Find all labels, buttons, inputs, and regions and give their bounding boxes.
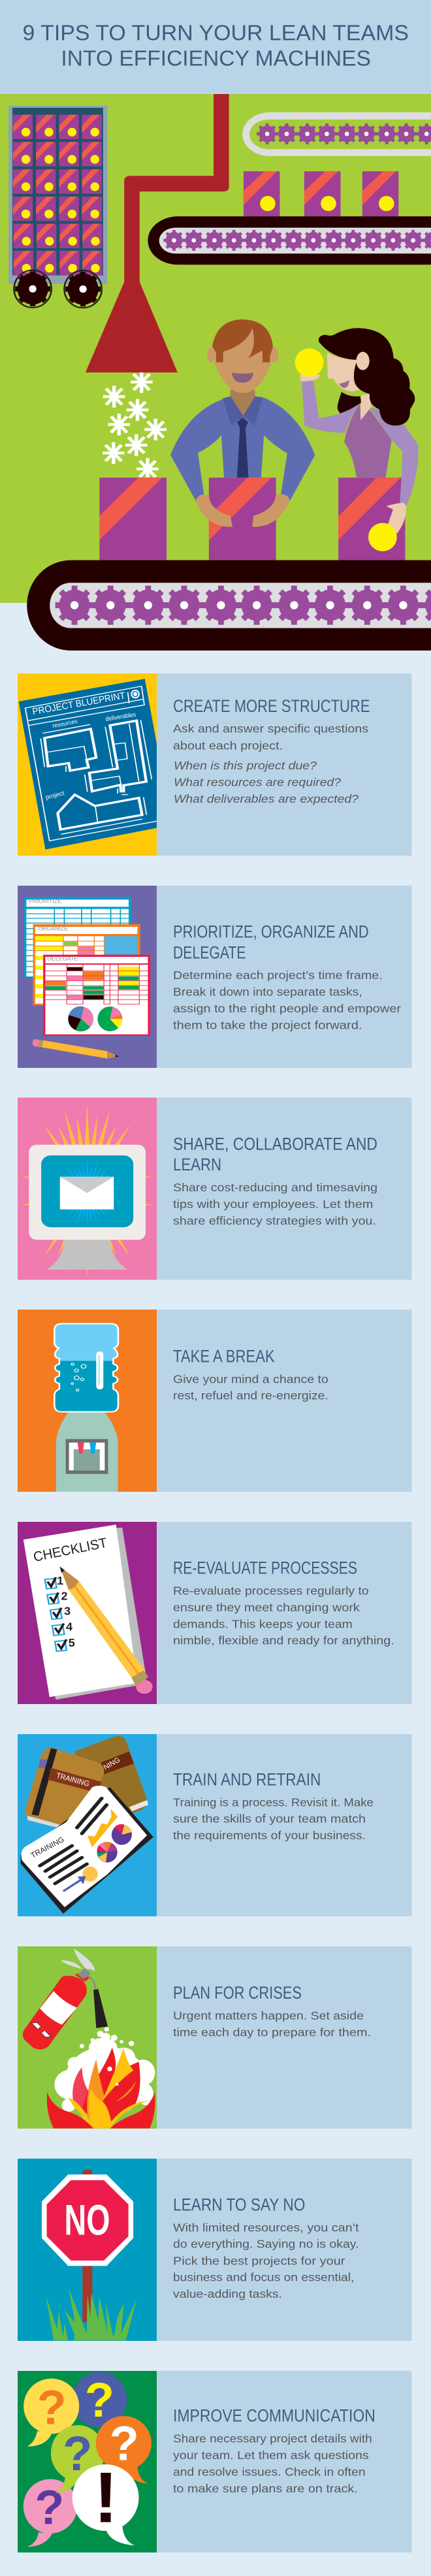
icon: speech bubbles	[18, 2371, 157, 2552]
body text: tips with your employees. Let them	[173, 1198, 373, 1211]
body text: Share necessary project details with	[173, 2432, 372, 2445]
panel: prioritize, organize and delegate	[18, 886, 411, 1068]
icon: speech bubbles: ?	[37, 2380, 67, 2434]
heading: TAKE A BREAK	[173, 1347, 275, 1366]
body text: When is this project due?	[174, 759, 317, 772]
body text	[173, 2432, 372, 2495]
icon: checklist and pencil	[18, 1522, 157, 1704]
icon: no sign in grass	[18, 2159, 157, 2341]
title	[22, 20, 409, 71]
icon: speech bubbles: ?	[110, 2417, 139, 2471]
icon: training books: TRAINING	[56, 1772, 90, 1788]
icon: project blueprint: project	[45, 790, 65, 801]
icon: speech bubbles: !	[94, 2457, 118, 2537]
icon: training books	[18, 1734, 157, 1916]
icon: project blueprint	[18, 673, 172, 856]
lower conveyor belt	[27, 560, 431, 651]
icon: water cooler	[18, 1310, 157, 1492]
flames	[47, 2048, 155, 2129]
heading: DELEGATE	[173, 942, 246, 962]
body text: time each day to prepare for them.	[173, 2025, 371, 2038]
icon: checklist and pencil: 5	[69, 1636, 75, 1649]
heading: CREATE MORE STRUCTURE	[173, 696, 370, 716]
body text	[173, 2221, 359, 2300]
body text: the requirements of your business.	[173, 1829, 366, 1842]
icon: training books: NING	[103, 1756, 121, 1772]
body text	[173, 1584, 394, 1647]
icon: checklist and pencil: 2	[61, 1589, 67, 1602]
heading: IMPROVE COMMUNICATION	[173, 2406, 375, 2425]
body text: Give your mind a chance to	[173, 1372, 328, 1385]
body text: Ask and answer specific questions	[173, 722, 368, 735]
body text: What deliverables are expected?	[174, 792, 359, 805]
body text: nimble, flexible and ready for anything.	[173, 1634, 394, 1647]
panel: plan for crises	[18, 1946, 411, 2129]
icon: checklist and pencil: 3	[64, 1605, 71, 1618]
body text: Re-evaluate processes regularly to	[173, 1584, 369, 1597]
panel: take a break	[18, 1310, 411, 1492]
body text	[173, 1795, 374, 1842]
body text: assign to the right people and empower	[173, 1002, 401, 1015]
title: INTO EFFICIENCY MACHINES	[61, 46, 371, 71]
icon: project blueprint: resources	[52, 718, 78, 729]
icon: checklist and pencil: 4	[66, 1620, 72, 1634]
panel: re-evaluate processes	[18, 1522, 411, 1704]
icon: spreadsheets and pencil: DELEGATE	[47, 955, 78, 961]
body text: business and focus on essential,	[173, 2271, 354, 2284]
body text: Determine each project’s time frame.	[173, 969, 383, 982]
icon: no sign in grass: NO	[64, 2196, 110, 2244]
lower boxes	[99, 477, 405, 560]
hero illustration: factory assembly line	[0, 94, 431, 651]
body text	[173, 722, 368, 805]
body text: share efficiency strategies with you.	[173, 1214, 376, 1227]
body text: and resolve issues. Check in often	[173, 2466, 366, 2479]
header band with title	[0, 0, 431, 94]
heading: LEARN	[173, 1155, 221, 1174]
body text: to make sure plans are on track.	[173, 2482, 358, 2495]
icon: checklist and pencil: CHECKLIST	[32, 1536, 108, 1565]
panel: create more structure	[18, 673, 411, 856]
man	[170, 319, 315, 560]
icon: fire extinguisher and flames	[18, 1946, 157, 2129]
body text: With limited resources, you can’t	[173, 2221, 359, 2234]
body text: them to take the project forward.	[173, 1018, 362, 1031]
body text	[173, 1181, 377, 1227]
body text: Training is a process. Revisit it. Make	[173, 1795, 374, 1809]
body text	[173, 2009, 371, 2038]
storage rack with boxes on wheels	[8, 106, 107, 308]
foam cloud	[54, 2027, 155, 2116]
heading: LEARN TO SAY NO	[173, 2195, 305, 2214]
body text	[173, 969, 401, 1031]
heading: SHARE, COLLABORATE AND	[173, 1135, 377, 1154]
heading: PLAN FOR CRISES	[173, 1983, 302, 2003]
body text: demands. This keeps your team	[173, 1617, 353, 1630]
woman	[295, 328, 419, 551]
body text: What resources are required?	[174, 776, 341, 789]
red pipe and funnel	[86, 94, 229, 372]
panel: train and retrain	[18, 1734, 411, 1916]
icon: computer with envelope	[18, 1097, 157, 1280]
body text	[173, 1372, 328, 1402]
body text: do everything. Saying no is okay.	[173, 2238, 359, 2251]
falling white particles	[103, 371, 167, 480]
body text: Urgent matters happen. Set aside	[173, 2009, 364, 2022]
panel: learn to say no	[18, 2159, 411, 2341]
icon: speech bubbles: ?	[85, 2373, 114, 2427]
icon: speech bubbles: ?	[63, 2426, 92, 2481]
body text: Pick the best projects for your	[173, 2254, 345, 2267]
body text: Break it down into separate tasks,	[173, 985, 362, 998]
body text: sure the skills of your team match	[173, 1812, 366, 1826]
boxes on middle conveyor	[244, 171, 398, 216]
body text: ensure they meet changing work	[173, 1601, 360, 1614]
title: 9 TIPS TO TURN YOUR LEAN TEAMS	[22, 20, 409, 44]
icon: speech bubbles: ?	[35, 2481, 64, 2535]
middle conveyor belt	[148, 216, 431, 265]
heading	[173, 1135, 377, 1174]
panel: improve communication	[18, 2371, 411, 2552]
body text: Share cost-reducing and timesaving	[173, 1181, 377, 1194]
icon: spreadsheets and pencil: PRIORITIZE	[29, 898, 62, 905]
body text: about each project.	[173, 739, 283, 752]
body text: rest, refuel and re-energize.	[173, 1389, 328, 1402]
icon: spreadsheets and pencil	[18, 886, 157, 1068]
panel: share, collaborate and learn	[18, 1097, 411, 1280]
heading	[173, 922, 369, 962]
icon: training books: TRAINING	[29, 1836, 66, 1860]
heading: RE-EVALUATE PROCESSES	[173, 1558, 357, 1577]
body text: your team. Let them ask questions	[173, 2449, 369, 2462]
icon: project blueprint: PROJECT BLUEPRINT	[31, 690, 126, 717]
heading: PRIORITIZE, ORGANIZE AND	[173, 922, 369, 942]
body text: value-adding tasks.	[173, 2287, 282, 2300]
icon: project blueprint: deliverables	[105, 711, 136, 723]
heading: TRAIN AND RETRAIN	[173, 1769, 321, 1789]
icon: spreadsheets and pencil: ORGANIZE	[38, 925, 68, 931]
icon: checklist and pencil: 1	[57, 1574, 63, 1587]
upper conveyor belt	[242, 112, 431, 156]
